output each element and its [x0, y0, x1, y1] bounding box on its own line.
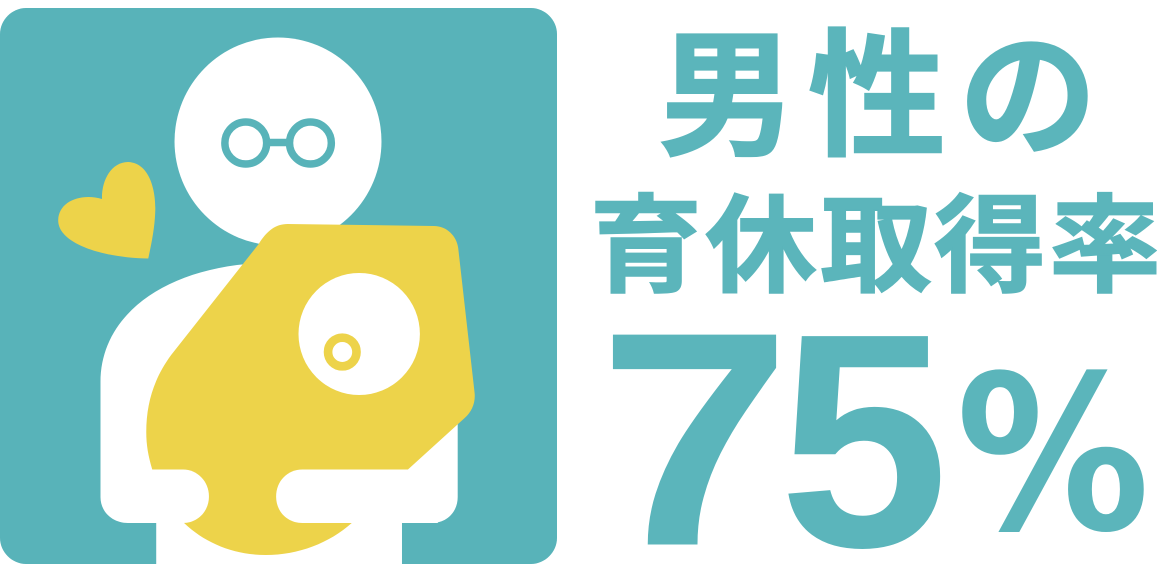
statistic: 75% — [598, 269, 1150, 564]
icon: father left hand — [129, 470, 209, 523]
panel: illustration of father holding baby — [0, 8, 557, 564]
icon: glasses — [225, 122, 331, 164]
icon: father body — [100, 264, 458, 564]
heading: 男性の: 男 — [658, 20, 796, 174]
icon: heart — [58, 162, 155, 258]
heading: 男性の: 性 — [808, 20, 946, 174]
icon: father with baby — [58, 38, 475, 564]
heading: 育休取得率: 休 — [705, 188, 817, 306]
heading: 育休取得率: 育 — [590, 188, 702, 306]
icon: father head — [175, 38, 381, 246]
heading: 育休取得率: 得 — [934, 188, 1046, 306]
icon: baby blanket — [146, 224, 475, 555]
icon: baby face — [298, 273, 420, 395]
icon: father right hand — [276, 470, 438, 523]
heading: 育休取得率: 取 — [820, 188, 932, 306]
icon: baby mouth ring — [328, 338, 357, 366]
heading: 男性の: の — [959, 20, 1097, 174]
